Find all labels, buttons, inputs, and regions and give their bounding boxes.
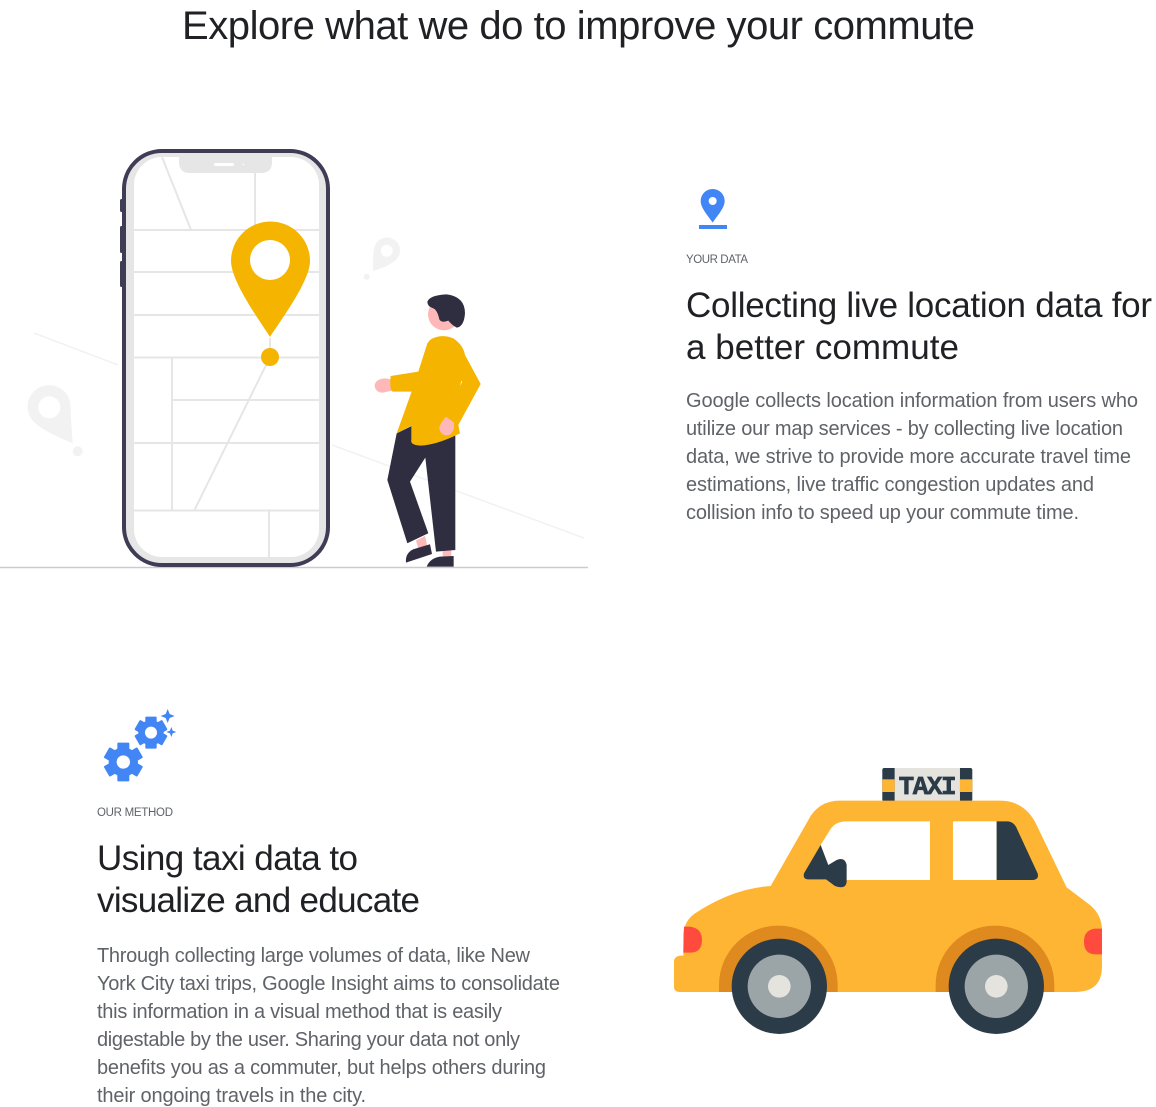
label: OUR METHOD [97,807,173,819]
phone [120,151,328,565]
text block: estimations, live traffic congestion updates and [686,474,1094,496]
text block: this information in a visual method that is easily [97,1001,502,1023]
heading: Using taxi data to [97,839,358,878]
label: YOUR DATA [686,254,748,266]
heading: Collecting live location data for [686,286,1152,325]
text block: their ongoing travels in the city. [97,1085,366,1107]
icon: faded large pin [28,385,83,456]
icon: yellow map pin [231,222,310,366]
heading: visualize and educate [97,881,420,920]
section: your data [686,189,1152,524]
text block [97,945,560,1107]
taxi windows [804,821,1038,887]
illustration: phone with map and person [0,151,588,568]
section: our method [97,709,560,1107]
taxi body [674,801,1102,992]
text block: York City taxi trips, Google Insight aims to consolidate [97,973,560,995]
illustration: taxi [674,768,1102,1034]
icon: location pin [699,189,727,229]
text block: utilize our map services - by collecting live location [686,418,1123,440]
text block: digestable by the user. Sharing your data not only [97,1029,520,1051]
text block: benefits you as a commuter, but helps others during [97,1057,546,1079]
text block: collision info to speed up your commute time. [686,502,1079,524]
title: Explore what we do to improve your commute [182,4,975,48]
text block: data, we strive to provide more accurate travel time [686,446,1131,468]
icon: gears with sparkles [104,709,176,781]
taxi roof sign: TAXI [899,772,957,802]
heading [97,839,420,920]
front wheel [719,926,838,1034]
person [375,294,481,567]
taxi lights [683,927,1102,954]
heading: a better commute [686,328,959,367]
text block: Through collecting large volumes of data, like New [97,945,531,967]
rear wheel [936,926,1054,1034]
icon: faded small pin [364,237,400,280]
text block [686,390,1138,524]
heading [686,286,1152,367]
text block: Google collects location information from users who [686,390,1138,412]
taxi roof sign [882,768,972,802]
